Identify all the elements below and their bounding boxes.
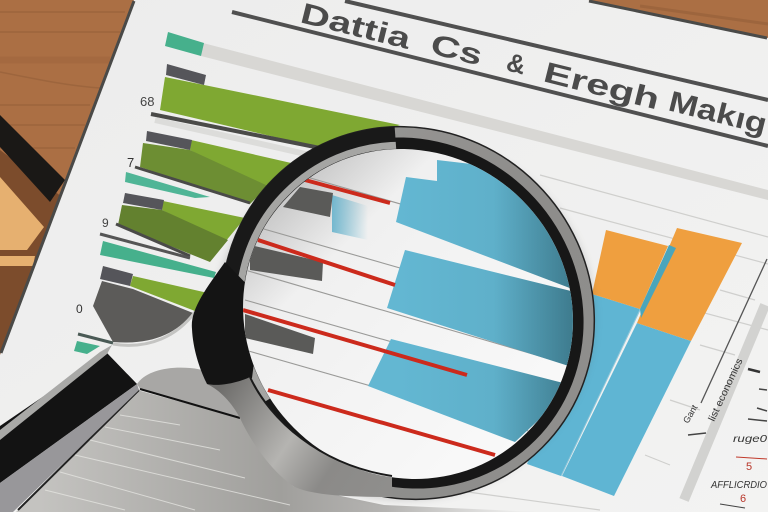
bar row 2: green: [125, 131, 300, 204]
title text: Makıg: [665, 86, 768, 141]
bar row 2: green: 7: [127, 155, 134, 170]
lens lower rim line: [250, 377, 392, 476]
bar row 3: green: [100, 193, 245, 278]
magnified blue bar 3: [368, 339, 575, 442]
handle top highlight: [0, 345, 112, 440]
title text: &: [504, 47, 529, 80]
soft shadow: [215, 136, 595, 500]
ring upper-left silver rim: [238, 142, 396, 402]
right chart gridlines: [380, 175, 768, 510]
paper left and top edge: [1, 1, 767, 353]
right axis text column: list economics: [707, 357, 745, 423]
neck: [137, 368, 240, 418]
lens glass: [243, 149, 573, 479]
lens contents: [243, 160, 575, 455]
faded blue patch: [332, 195, 368, 240]
magnified gray blocks: [283, 187, 333, 217]
right axis text column: Gant: [681, 403, 700, 425]
icon: tan folder on desk: [0, 177, 44, 266]
right axis text column: 6: [740, 493, 746, 505]
right axis text column: 5: [746, 461, 752, 473]
icon: black pen on desk: [0, 115, 65, 202]
title text: [297, 0, 768, 141]
bar row 4: gray and green: [74, 266, 208, 354]
title text: Eregh: [540, 57, 663, 116]
lens gridlines: [245, 175, 560, 440]
bar row 4: gray and green: 0: [76, 302, 83, 316]
gray header stripe: [201, 43, 768, 200]
magnified blue bar 1: [396, 160, 575, 290]
bar chart: blue columns with orange caps: [527, 228, 742, 496]
teal legend chip: [165, 32, 204, 56]
title band: [232, 0, 768, 146]
bar row 3: green: 9: [102, 216, 109, 230]
right axis text column: ruge0: [733, 434, 768, 445]
lower-left steel swoop: [207, 377, 392, 497]
right axis text column: [681, 259, 768, 508]
small lens rim arc: [113, 312, 195, 345]
magnified red lines: [243, 180, 495, 455]
handle lower steel strip: [0, 384, 139, 512]
handle black grip: [0, 353, 137, 483]
bar row 1: green: [140, 64, 400, 155]
lined paper beneath the lens: [16, 390, 540, 512]
title text: Cs: [427, 29, 486, 72]
ring upper-left black band: [227, 127, 396, 273]
neck black blob: [192, 262, 262, 387]
magnified blue bar 2: [387, 250, 575, 368]
ring outer steel: [222, 127, 594, 499]
axis value: 68: [140, 94, 154, 109]
magnifying glass: [0, 127, 595, 512]
ring inner black band: [232, 137, 584, 489]
